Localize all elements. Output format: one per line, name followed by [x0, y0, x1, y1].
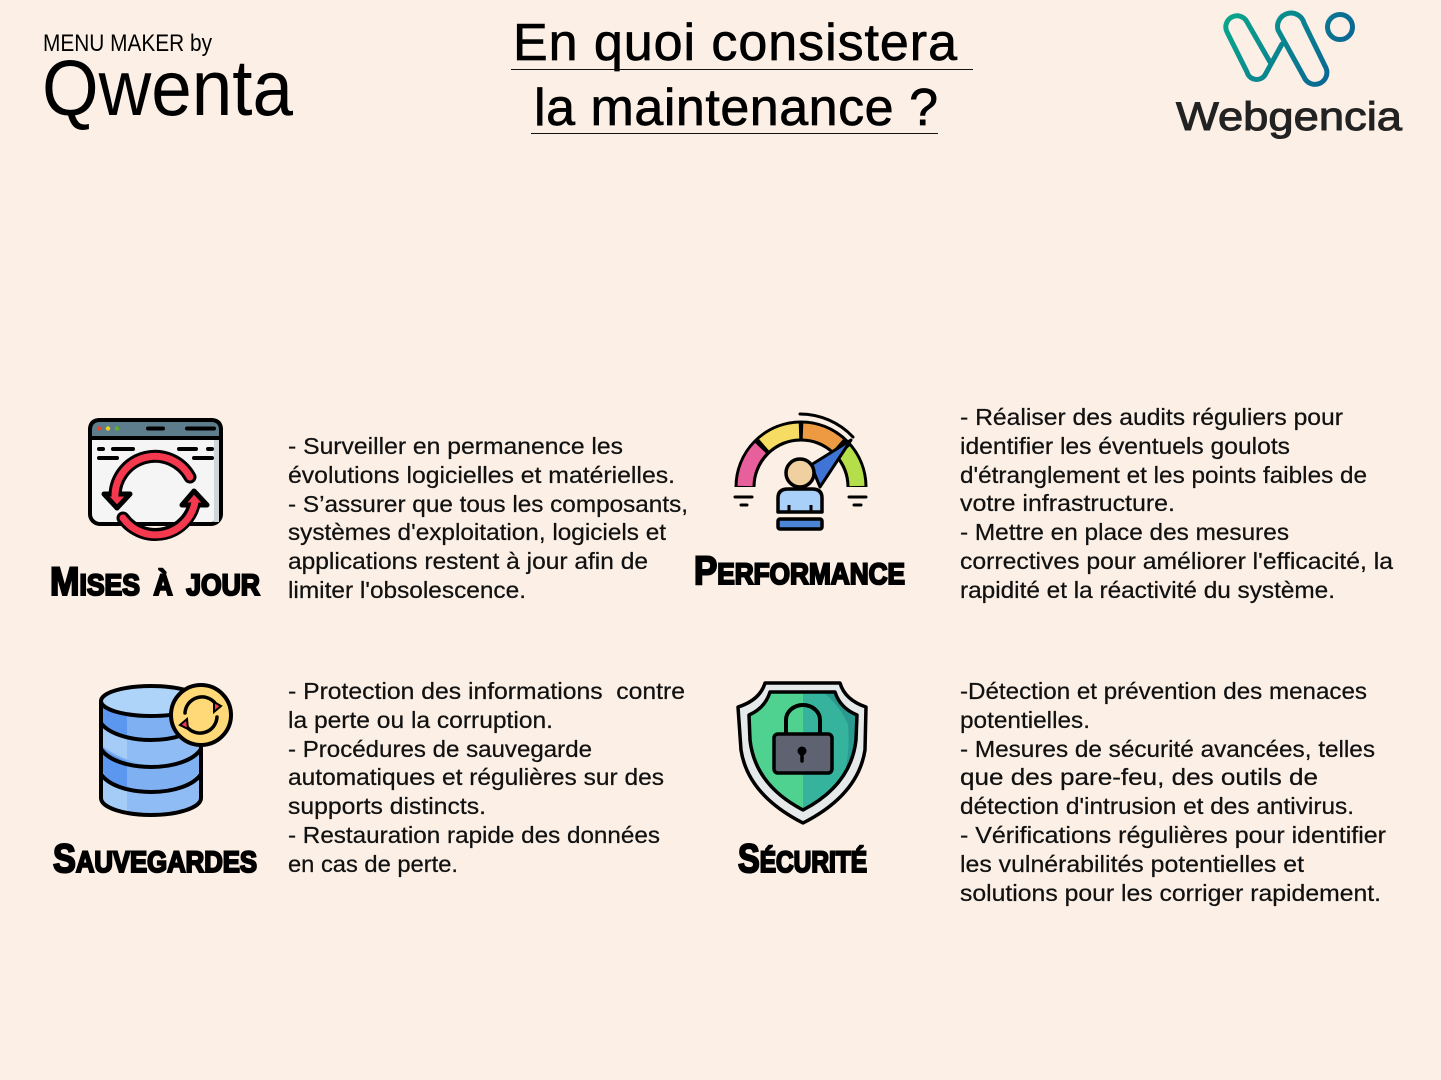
text block: sauvegardes: - Restauration rapide des données: [288, 822, 660, 848]
text block: sécurité: - Vérifications régulières pour identifier: [960, 822, 1386, 848]
text block: performance: - Réaliser des audits réguliers pour: [960, 404, 1343, 430]
text block: mises à jour: - Surveiller en permanence les: [288, 433, 623, 459]
icon: database with sync badge: [101, 685, 231, 815]
text block: performance: - Mettre en place des mesures: [960, 519, 1289, 545]
icon: shield with padlock: [738, 683, 866, 823]
title: [511, 14, 973, 137]
text block: sécurité: que des pare-feu, des outils de: [960, 764, 1318, 790]
panel: mises à jour: [50, 420, 688, 604]
text block: sécurité: [960, 678, 1386, 906]
logo: Webgencia: [1176, 13, 1403, 139]
heading: sécurité: SÉCURITÉ: [738, 837, 867, 881]
text block: performance: [960, 404, 1393, 603]
text block: mises à jour: applications restent à jour afin de: [288, 548, 648, 574]
text block: sauvegardes: - Protection des informations contre: [288, 678, 685, 704]
text block: sauvegardes: automatiques et régulières sur des: [288, 764, 664, 790]
text block: mises à jour: [288, 433, 688, 603]
logo: Menu Maker by Qwenta: MENU MAKER by: [43, 30, 212, 57]
text block: performance: identifier les éventuels goulots: [960, 433, 1290, 459]
panel: sécurité: [738, 678, 1386, 906]
text block: sauvegardes: la perte ou la corruption.: [288, 707, 553, 733]
text block: sécurité: - Mesures de sécurité avancées, telles: [960, 736, 1375, 762]
text block: performance: votre infrastructure.: [960, 490, 1175, 516]
heading: performance: PERFORMANCE: [694, 549, 905, 593]
text block: performance: correctives pour améliorer l'efficacité, la: [960, 548, 1393, 574]
text block: mises à jour: limiter l'obsolescence.: [288, 577, 526, 603]
heading: mises à jour: MISES À JOUR: [50, 560, 260, 604]
text block: sauvegardes: en cas de perte.: [288, 851, 458, 877]
title: la maintenance ?: [534, 79, 938, 137]
logo: Webgencia: Webgencia: [1176, 95, 1403, 139]
text block: sécurité: -Détection et prévention des menaces: [960, 678, 1367, 704]
text block: sauvegardes: - Procédures de sauvegarde: [288, 736, 592, 762]
logo: Menu Maker by Qwenta: Qwenta: [42, 43, 293, 132]
icon: speedometer with person: [735, 414, 866, 529]
text block: mises à jour: - S’assurer que tous les composants,: [288, 491, 688, 517]
text block: sécurité: solutions pour les corriger rapidement.: [960, 880, 1381, 906]
text block: performance: rapidité et la réactivité du système.: [960, 577, 1335, 603]
icon: browser window with refresh arrows: [90, 420, 221, 535]
text block: sauvegardes: supports distincts.: [288, 793, 486, 819]
heading: sauvegardes: SAUVEGARDES: [53, 837, 257, 881]
text block: sécurité: détection d'intrusion et des antivirus.: [960, 793, 1354, 819]
text block: performance: d'étranglement et les points faibles de: [960, 462, 1367, 488]
text block: mises à jour: évolutions logicielles et matérielles.: [288, 462, 675, 488]
text block: sauvegardes: [288, 678, 685, 877]
text block: sécurité: potentielles.: [960, 707, 1090, 733]
text block: mises à jour: systèmes d'exploitation, logiciels et: [288, 519, 667, 545]
text block: sécurité: les vulnérabilités potentielles et: [960, 851, 1305, 877]
panel: sauvegardes: [53, 678, 685, 881]
panel: performance: [694, 404, 1393, 603]
title: En quoi consistera: [513, 14, 957, 72]
